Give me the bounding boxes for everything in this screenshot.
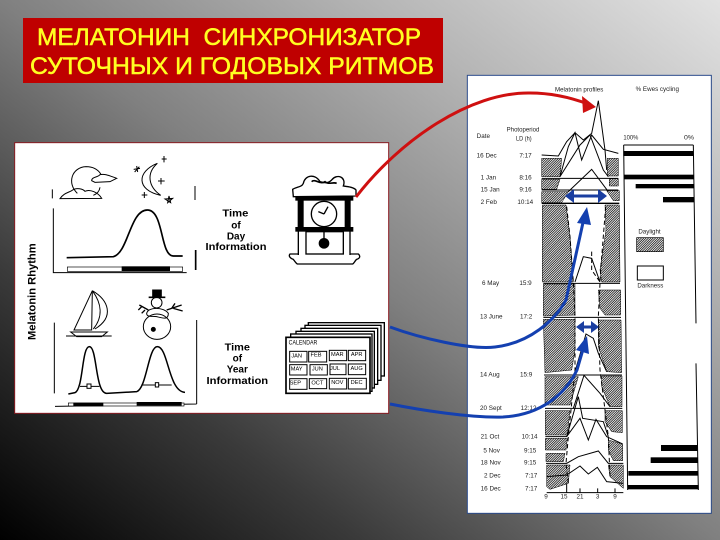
ewes cycling bars [623, 145, 699, 490]
label: time of year information: Year [227, 365, 248, 376]
icon: stack of calendars: APR [351, 352, 362, 358]
icon: stack of calendars: SEP [290, 381, 301, 387]
icon: snowman [138, 290, 183, 339]
label: time of day information: Day [227, 231, 246, 242]
date and photoperiod table: 15:9 [519, 280, 532, 287]
chart: time of year melatonin curve [54, 320, 197, 406]
date and photoperiod table: 20 Sept [480, 405, 502, 412]
icon: stack of calendars: JUN [312, 367, 323, 373]
chart: time of day melatonin curve [52, 186, 196, 273]
date and photoperiod table: 12:12 [521, 405, 537, 412]
icon: stack of calendars: AUG [351, 366, 363, 372]
date and photoperiod table: 7:17 [525, 486, 538, 493]
x axis hours: 15 [560, 494, 568, 501]
label: time of day information: Information [205, 242, 266, 253]
chart headings: % Ewes cycling [636, 86, 679, 93]
icon: pendulum clock [289, 176, 360, 264]
chart headings: Date [477, 133, 490, 140]
chart headings: Photoperiod [507, 127, 540, 134]
icon: stack of calendars: JUL [330, 366, 340, 372]
label: time of day information: of [231, 220, 241, 231]
x axis hours [544, 494, 617, 501]
label: time of day information: Time [222, 209, 249, 220]
label: time of day information [205, 209, 266, 253]
date and photoperiod table: 1 Jan [481, 174, 497, 181]
date and photoperiod table: 16 Dec [481, 486, 501, 493]
date and photoperiod table: 2 Feb [481, 199, 497, 206]
arrow: red from clock to December melatonin peak [356, 93, 596, 197]
icon: stack of calendars [286, 323, 384, 393]
date and photoperiod table: 7:17 [525, 473, 538, 480]
date and photoperiod table: 14 Aug [480, 372, 500, 379]
date and photoperiod table: 16 Dec [477, 152, 497, 159]
chart headings [477, 86, 694, 143]
label: time of year information: Time [225, 343, 250, 354]
chart headings: LD (h) [516, 136, 532, 143]
date and photoperiod table: 8:16 [519, 174, 532, 181]
date and photoperiod table: 7:17 [519, 152, 532, 159]
title banner [23, 18, 443, 83]
date and photoperiod table: 10:14 [522, 433, 538, 440]
y axis label: Melatonin Rhythm [27, 243, 39, 340]
icon: crescent moon with stars [134, 156, 173, 203]
x axis hours: 9 [613, 494, 617, 501]
date and photoperiod table: 13 June [480, 313, 503, 320]
date and photoperiod table: 21 Oct [481, 433, 500, 440]
x axis hours: 3 [596, 494, 600, 501]
icon: stack of calendars: CALENDAR [289, 340, 318, 346]
icon: stack of calendars: NOV [331, 380, 344, 386]
date and photoperiod table: 15:9 [520, 372, 533, 379]
x axis hours: 21 [576, 494, 584, 501]
legend: daylight and darkness [637, 228, 663, 289]
icon: stack of calendars: OCT [311, 381, 324, 387]
legend: daylight and darkness: Darkness [637, 282, 663, 289]
icon: stack of calendars: DEC [351, 380, 363, 386]
panel: melatonin profiles chart [467, 75, 711, 513]
icon: stack of calendars: MAR [331, 352, 344, 358]
icon: stack of calendars: JAN [291, 353, 302, 359]
icon: stack of calendars: FEB [310, 353, 322, 359]
date and photoperiod table: 9:15 [524, 460, 537, 467]
label: time of year information: of [233, 354, 243, 365]
icon: sailboat [66, 291, 112, 337]
date and photoperiod table: 9:16 [519, 187, 532, 194]
date and photoperiod table: 10:14 [517, 199, 534, 206]
date and photoperiod table: 2 Dec [484, 473, 501, 480]
date and photoperiod table [477, 152, 538, 493]
date and photoperiod table: 17:2 [520, 313, 533, 320]
chart headings: 0% [684, 135, 694, 142]
chart headings: 100% [623, 135, 639, 142]
label: time of year information [206, 343, 268, 387]
panel: melatonin rhythm diagram [15, 143, 389, 413]
chart headings: Melatonin profiles [555, 87, 603, 94]
title banner: СУТОЧНЫХ И ГОДОВЫХ РИТМОВ [30, 53, 434, 80]
arrow: blue from calendar to summer profile [390, 207, 591, 347]
x axis hours: 9 [544, 494, 548, 501]
melatonin profile lines [542, 101, 623, 493]
arrow: night duration in winter [565, 189, 607, 203]
date and photoperiod table: 18 Nov [481, 460, 502, 467]
date and photoperiod table: 15 Jan [481, 187, 500, 194]
arrow: night duration in summer [576, 321, 599, 333]
label: time of year information: Information [206, 376, 268, 387]
arrow: blue from calendar to autumn profile [390, 336, 589, 417]
date and photoperiod table: 9:15 [524, 448, 537, 455]
icon: moon behind cloud [60, 167, 117, 199]
icon: stack of calendars: MAY [291, 367, 303, 373]
legend: daylight and darkness: Daylight [638, 228, 661, 235]
date and photoperiod table: 5 Nov [483, 448, 501, 455]
date and photoperiod table: 6 May [482, 280, 500, 287]
daylight hatching [542, 158, 623, 489]
title banner: МЕЛАТОНИН СИНХРОНИЗАТОР [37, 24, 421, 51]
